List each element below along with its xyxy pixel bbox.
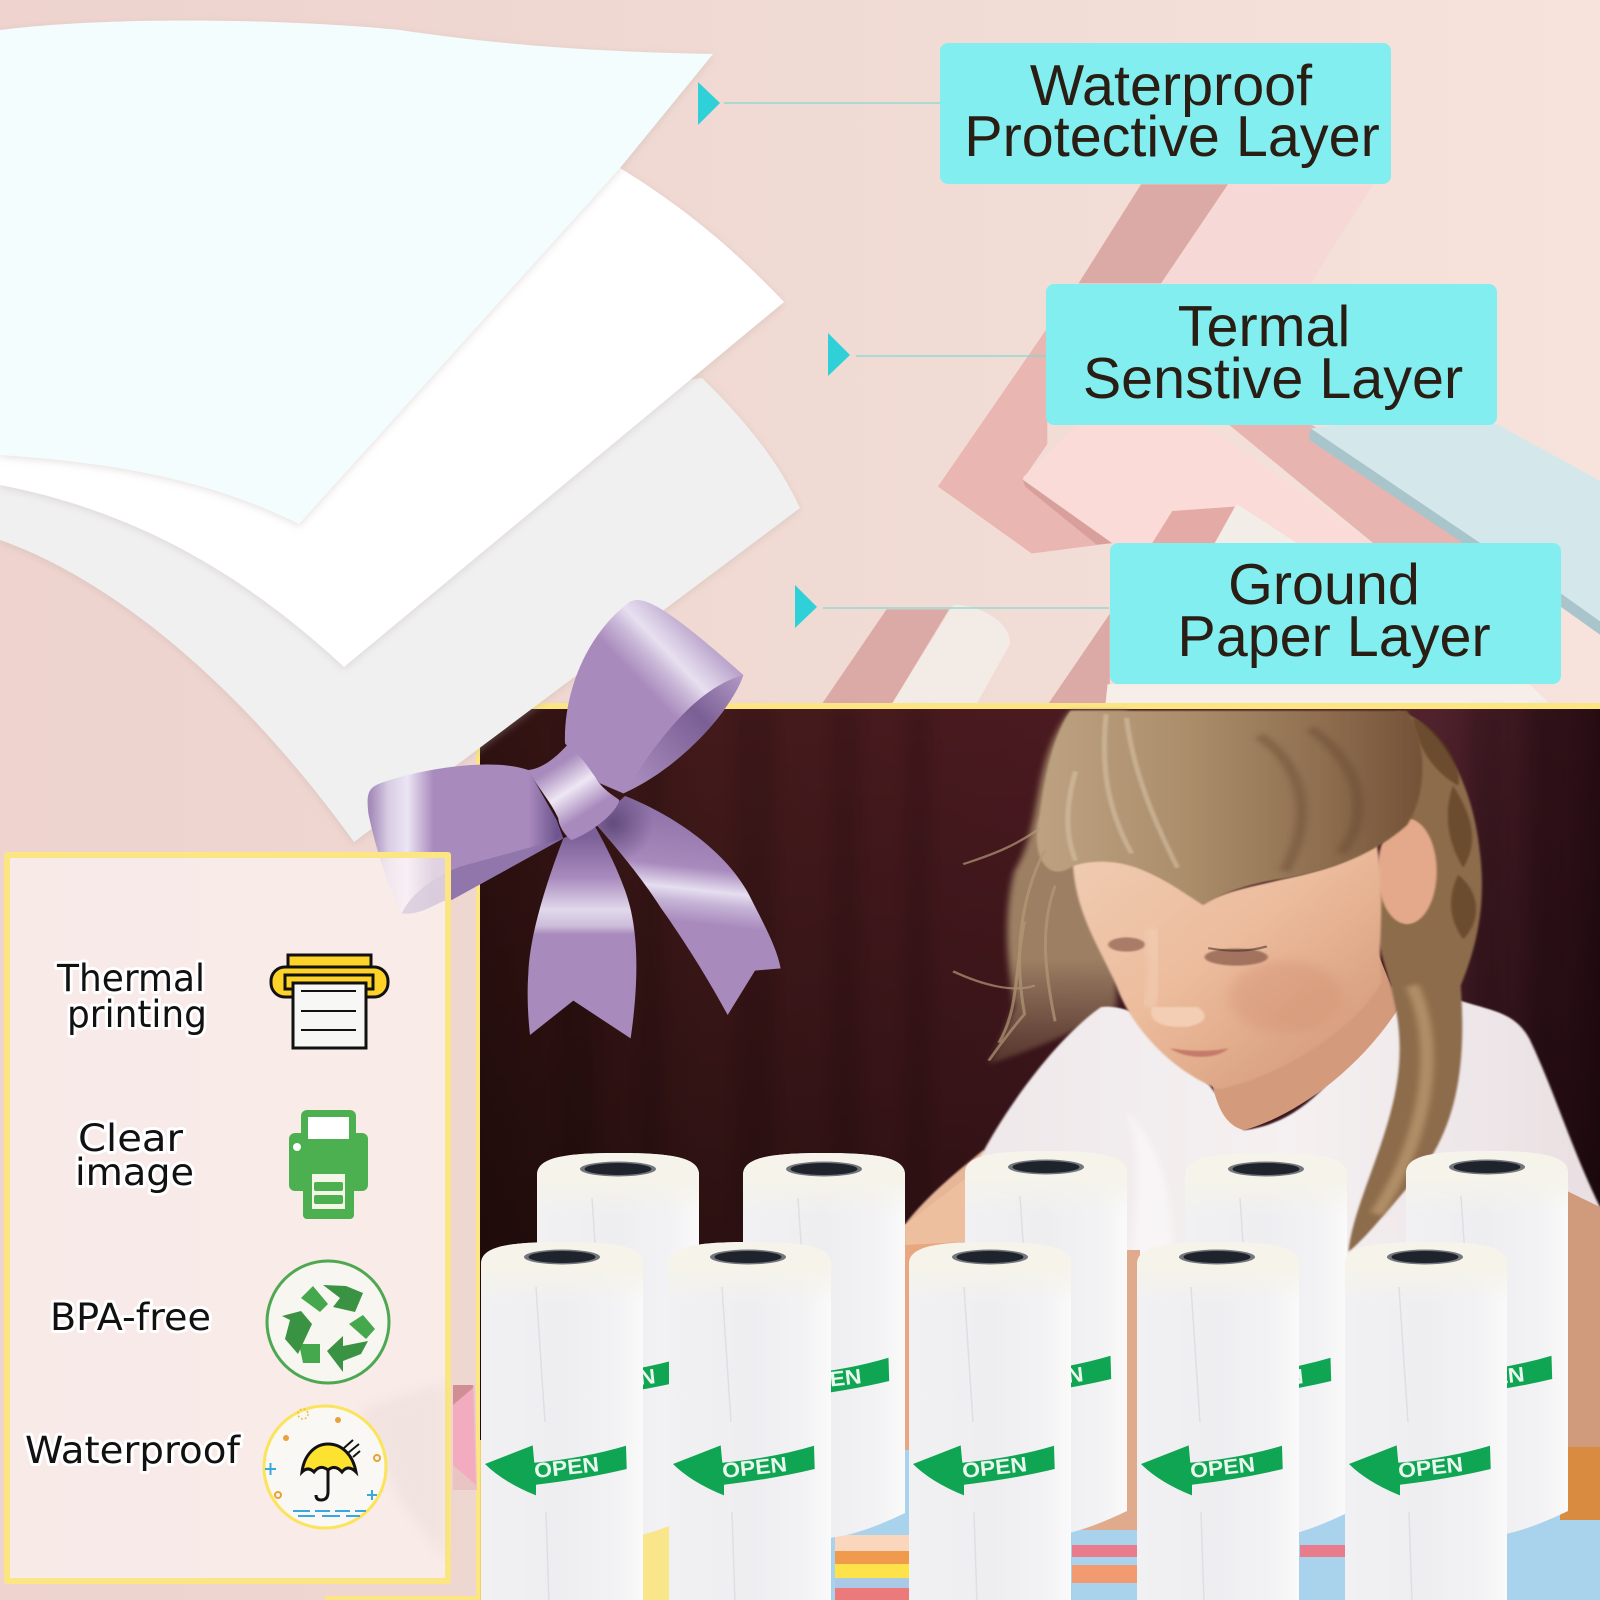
feature: Waterproof text: Waterproof (25, 1429, 241, 1472)
thermal rolls group (481, 1151, 1568, 1600)
photo backdrop: dark curtain (480, 709, 1600, 1600)
back roll 2: OPEN (796, 1365, 863, 1395)
feature: Thermal printing text: printing (67, 993, 207, 1036)
background: abstract pastel blocks (821, 184, 1600, 705)
feature: Clear image text (75, 1117, 194, 1194)
ribbon bow (368, 600, 781, 1038)
front roll 4: OPEN (1189, 1453, 1256, 1483)
back roll 1 (537, 1153, 699, 1538)
feature: Thermal printing text: Thermal (56, 957, 205, 1000)
front roll 3 (909, 1242, 1071, 1600)
icon: umbrella in rain (264, 1406, 386, 1528)
label: Ground Paper Layer (1110, 543, 1561, 684)
photo: child at table (325, 703, 1600, 1600)
bow: centre knot (528, 746, 619, 840)
photo: arms (905, 1175, 1600, 1530)
feature: Clear image text: image (75, 1151, 194, 1194)
label: Waterproof Protective Layer: Waterproof (1030, 54, 1313, 118)
pointer arrow: ground layer (795, 585, 1109, 628)
back roll 1: OPEN (590, 1365, 657, 1395)
icon: yellow thermal printer (271, 955, 388, 1048)
front roll 1 (481, 1242, 643, 1600)
photo: girl figure (902, 711, 1600, 1260)
label: Ground Paper Layer: Paper Layer (1177, 605, 1491, 669)
front roll 2: OPEN (721, 1453, 788, 1483)
paper sheet: ground paper layer (0, 378, 800, 842)
back roll 5 (1406, 1151, 1568, 1536)
feature: BPA-free text: BPA-free (50, 1296, 211, 1339)
front roll 5 (1345, 1242, 1507, 1600)
label: Termal Senstive Layer (1046, 284, 1497, 425)
feature: Clear image text: Clear (78, 1117, 184, 1160)
icon: green printer (289, 1110, 368, 1219)
pointer arrow: waterproof layer (698, 82, 940, 125)
front roll 1: OPEN (533, 1453, 600, 1483)
bow: left loop (368, 764, 563, 914)
bow: right tail (595, 796, 781, 1015)
back roll 3 (965, 1151, 1127, 1536)
panel: product features (7, 855, 477, 1581)
label: Termal Senstive Layer: Termal (1178, 295, 1350, 359)
photo frame: yellow line (325, 703, 1600, 1600)
front roll 2 (669, 1242, 831, 1600)
front roll 3: OPEN (961, 1453, 1028, 1483)
back roll 4 (1185, 1153, 1347, 1538)
bow: upper loop (565, 600, 743, 793)
front roll 5: OPEN (1397, 1453, 1464, 1483)
bow: left tail (528, 823, 636, 1038)
pointer arrow: thermal layer (828, 333, 1046, 376)
feature: Thermal printing text (56, 957, 207, 1036)
back roll 2 (743, 1153, 905, 1538)
paper sheet: waterproof protective layer (0, 21, 713, 524)
label: Waterproof Protective Layer (940, 43, 1391, 184)
label: Waterproof Protective Layer: Protective Layer (964, 105, 1380, 169)
label: Ground Paper Layer: Ground (1228, 553, 1420, 617)
back roll 3: OPEN (1018, 1363, 1085, 1393)
photo: colourful table (480, 1440, 1600, 1600)
front roll 4 (1137, 1242, 1299, 1600)
paper sheet: thermal sensitive layer (0, 168, 784, 667)
icon: recycle symbol (267, 1261, 389, 1383)
back roll 5: OPEN (1459, 1363, 1526, 1393)
label: Termal Senstive Layer: Senstive Layer (1083, 347, 1463, 411)
back roll 4: OPEN (1238, 1365, 1305, 1395)
